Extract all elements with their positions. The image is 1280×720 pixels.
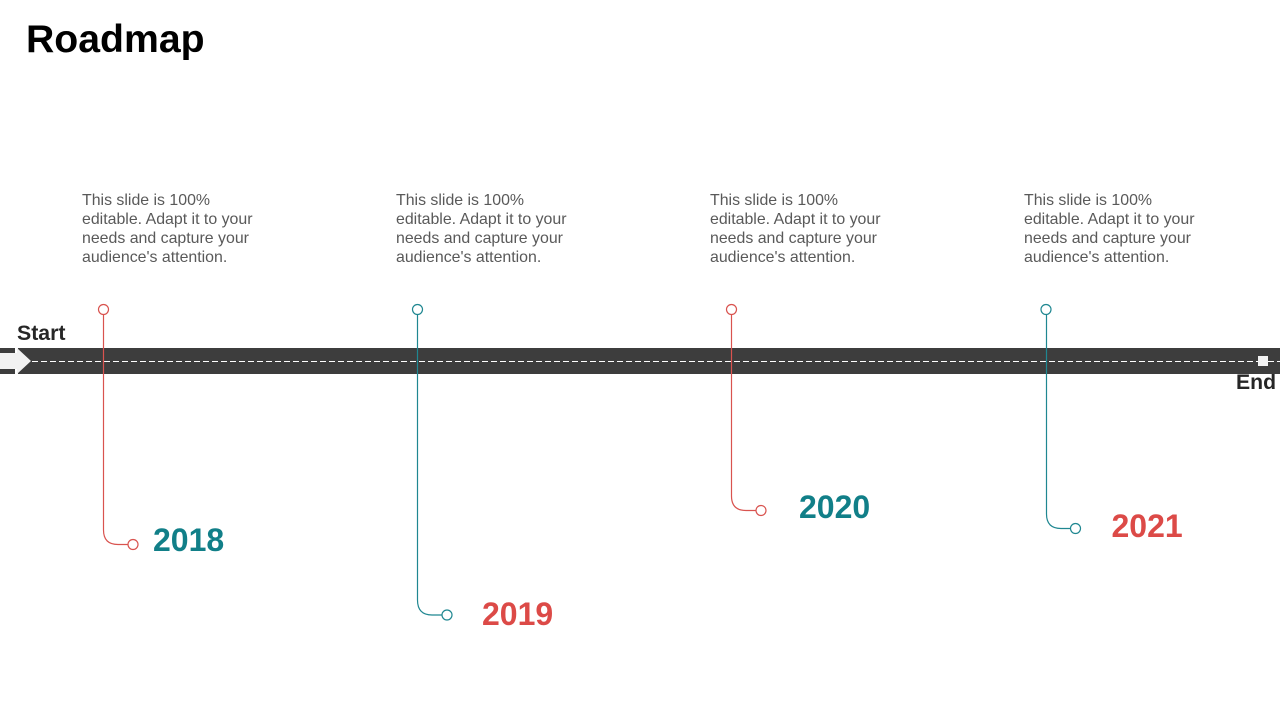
year: 2019: 2019 — [482, 596, 553, 632]
year: 2021: 2021 — [1112, 508, 1183, 544]
year: 2020: 2020 — [799, 489, 870, 525]
connector: 2018 — [98, 304, 138, 550]
text block: 2018 description: needs and capture your — [82, 230, 249, 247]
connector: 2020 — [726, 304, 766, 516]
end label: End — [1236, 371, 1276, 394]
road band — [0, 348, 1280, 374]
text block: 2019 description: This slide is 100% — [396, 192, 524, 209]
text block: 2020 description — [710, 192, 880, 266]
connector: 2021 — [1041, 304, 1080, 534]
text block: 2019 description: audience's attention. — [396, 249, 541, 266]
text block: 2019 description: needs and capture your — [396, 230, 563, 247]
text block: 2021 description: audience's attention. — [1024, 249, 1169, 266]
text block: 2020 description: audience's attention. — [710, 249, 855, 266]
text block: 2020 description: editable. Adapt it to your — [710, 211, 880, 228]
text block: 2020 description: This slide is 100% — [710, 192, 838, 209]
icon: start arrow — [0, 348, 31, 374]
text block: 2018 description: audience's attention. — [82, 249, 227, 266]
connector: 2019 — [412, 304, 452, 620]
text block: 2021 description — [1024, 192, 1194, 266]
text block: 2019 description — [396, 192, 566, 266]
text block: 2021 description: This slide is 100% — [1024, 192, 1152, 209]
text block: 2019 description: editable. Adapt it to your — [396, 211, 566, 228]
text block: 2018 description: This slide is 100% — [82, 192, 210, 209]
text block: 2021 description: needs and capture your — [1024, 230, 1191, 247]
text block: 2018 description: editable. Adapt it to your — [82, 211, 252, 228]
start label: Start — [17, 321, 66, 345]
text block: 2021 description: editable. Adapt it to your — [1024, 211, 1194, 228]
text block: 2020 description: needs and capture your — [710, 230, 877, 247]
year: 2018: 2018 — [153, 522, 224, 558]
title: Roadmap — [26, 18, 205, 61]
text block: 2018 description — [82, 192, 252, 266]
icon: end marker — [1258, 356, 1268, 366]
